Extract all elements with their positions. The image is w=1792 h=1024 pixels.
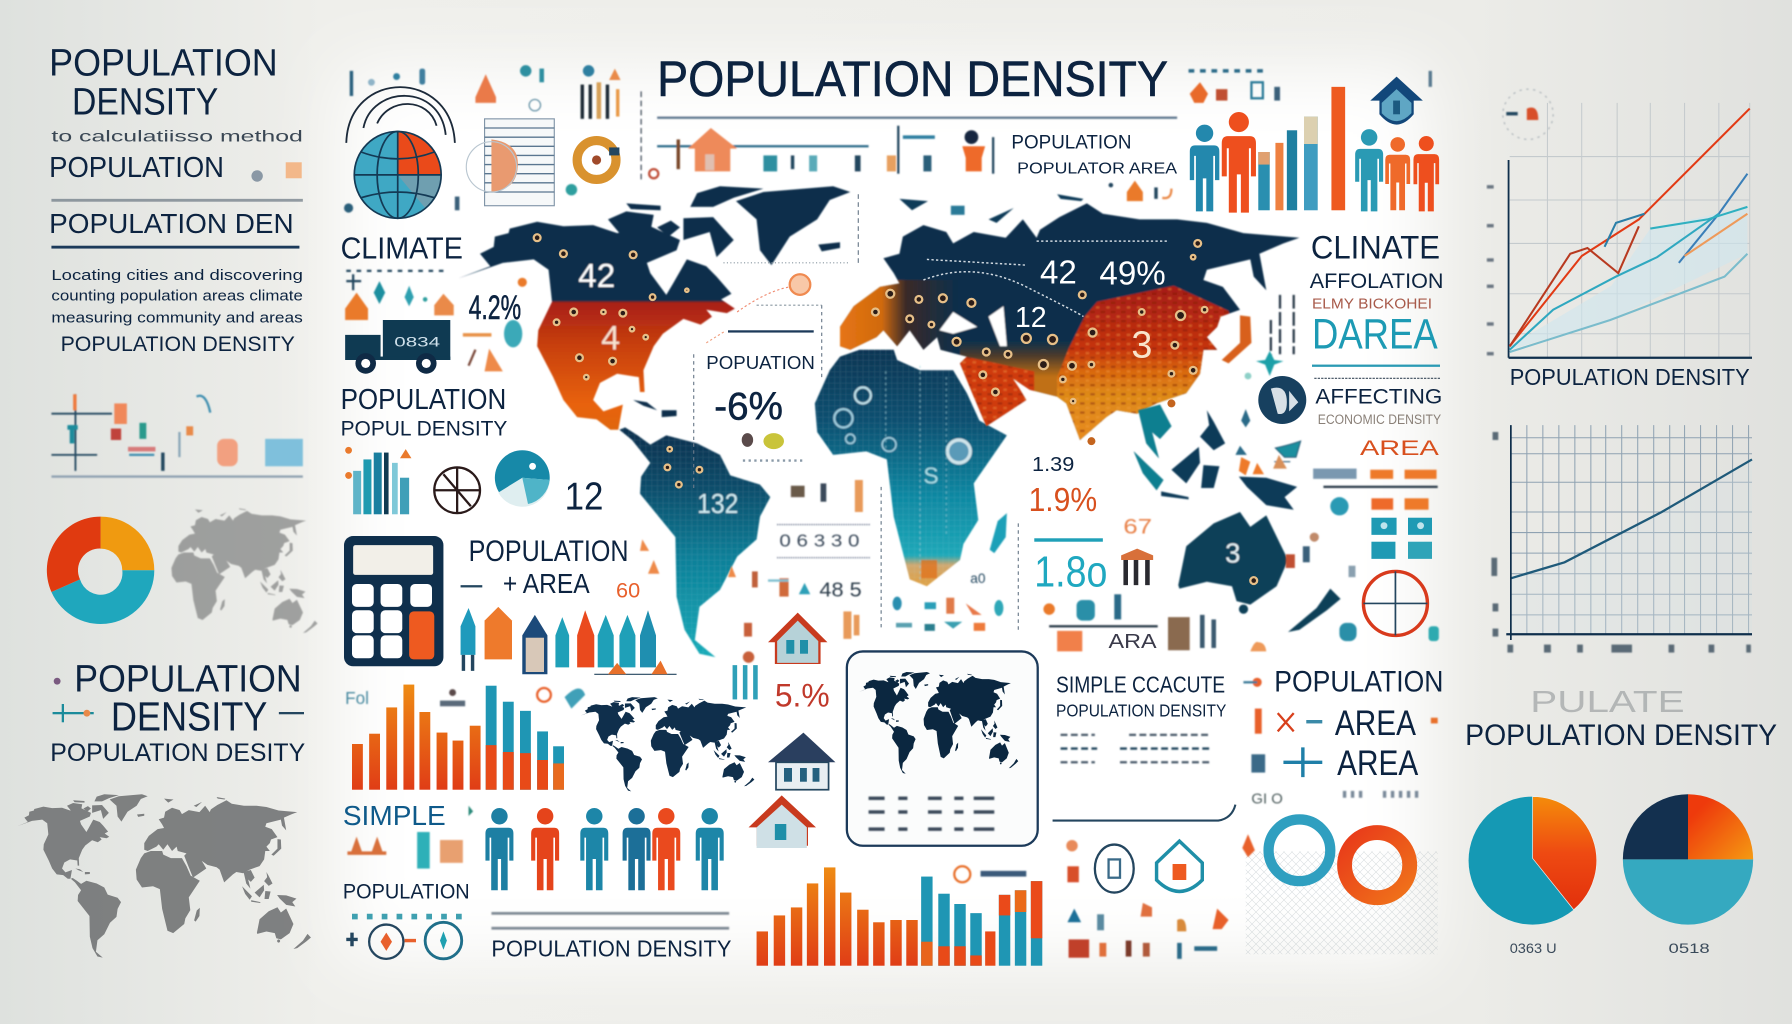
area word 1: AREA <box>1335 703 1416 743</box>
population density subtitle: POPULATION DENSITY <box>61 331 295 356</box>
person 1 <box>1190 125 1219 211</box>
chart: grid line chart <box>1491 425 1752 653</box>
stat: 42 north america: 42 <box>578 258 615 295</box>
stat: 12: 12 <box>565 476 603 519</box>
icon: house lower <box>749 795 816 848</box>
stat 1.9%: 1.9% <box>1029 482 1097 519</box>
marks right of asia <box>1235 295 1438 515</box>
main title: POPULATION DENSITY <box>657 50 1168 107</box>
mini building bars <box>1121 549 1153 585</box>
orange number: 60 <box>616 578 640 603</box>
density heading: DENSITY <box>111 693 267 739</box>
population label mid left: POPULATION <box>341 384 506 416</box>
tick labels <box>1491 432 1751 653</box>
climate label right: CLINATE <box>1311 229 1440 265</box>
small icons above rings <box>1242 791 1423 857</box>
small top-right icons <box>1189 71 1432 103</box>
left density block <box>50 657 305 767</box>
pie label left: 0363 U <box>1510 941 1557 956</box>
icon: dark circle badge <box>1258 376 1306 424</box>
teal rule <box>1312 365 1440 367</box>
icon: document with lines <box>466 119 554 206</box>
description text: Locating cities and discovering <box>51 268 303 284</box>
axis ticks <box>1487 185 1494 355</box>
pie label right: 0518 <box>1669 941 1710 956</box>
population word: POPULATION <box>1274 665 1443 698</box>
line chart caption: POPULATION DENSITY <box>1510 364 1750 390</box>
person 2 <box>1222 112 1256 213</box>
stat: 3 australia: 3 <box>1225 537 1240 568</box>
map card <box>847 651 1038 846</box>
simple calculate heading: SIMPLE CCACUTE <box>1056 672 1225 698</box>
small climate icons <box>345 271 527 320</box>
callout label: POPUATION <box>706 352 815 373</box>
icon pair of circles <box>346 917 466 959</box>
bar chart 2 <box>757 867 1042 966</box>
callout icons <box>742 433 784 449</box>
population area label: POPULATOR AREA <box>1017 161 1178 178</box>
right heading population density: POPULATION DENSITY <box>1465 719 1777 752</box>
simple label: SIMPLE <box>343 800 446 831</box>
person red <box>531 808 559 890</box>
person blue <box>623 808 651 890</box>
dotted routes <box>923 241 1167 317</box>
card data rows <box>869 797 994 831</box>
small icons around south america tail: 48 5 <box>819 579 862 602</box>
right text block <box>1310 229 1443 460</box>
stat: 132 south america: 132 <box>697 488 738 519</box>
small icons below africa: a0 <box>970 571 986 586</box>
minus markers <box>53 678 304 722</box>
icon: red target circle <box>1363 571 1427 635</box>
dash mark <box>461 585 482 587</box>
icons above bar chart <box>345 688 585 709</box>
calculator formula text <box>461 535 640 603</box>
small marks below strip <box>951 181 1171 215</box>
small truck-side marks <box>463 320 522 371</box>
small top-left icons <box>344 65 621 213</box>
climate label: CLIMATE <box>341 230 463 265</box>
density subtitle: POPULATION DESITY <box>50 739 305 767</box>
navy world map centre bottom <box>581 697 754 791</box>
population label: POPULATION <box>469 535 629 568</box>
population density caption bottom: POPULATION DENSITY <box>491 936 731 962</box>
icons above bar chart: Fol <box>345 688 369 708</box>
dashed separators <box>881 487 1018 630</box>
person teal third <box>696 808 724 890</box>
person teal <box>485 808 513 890</box>
faded heading: PULATE <box>1530 684 1685 719</box>
icon: house top right <box>1370 77 1423 125</box>
houses in circles icons <box>1095 841 1202 893</box>
panel: left text column <box>49 41 303 356</box>
calculation method caption: to calculatiisso method <box>51 129 303 146</box>
icon: house beside south america tip <box>768 613 827 664</box>
population label top middle: POPULATION <box>1011 132 1131 154</box>
people row <box>485 808 724 890</box>
area word 2: AREA <box>1337 743 1419 783</box>
description text <box>51 268 303 326</box>
small icons around south america tail: 0 6 3 3 0 <box>779 530 859 550</box>
small icons above rings: GI O <box>1251 791 1283 807</box>
left heading line 2: DENSITY <box>72 80 218 122</box>
multiply sign <box>1278 713 1294 731</box>
small icons under australia: 67 <box>1123 514 1152 539</box>
plus area label: + AREA <box>503 568 590 599</box>
world map main <box>458 186 1341 657</box>
darea label: DAREA <box>1312 311 1438 358</box>
truck label: 0834 <box>394 334 441 349</box>
stat: 4 usa: 4 <box>601 320 620 358</box>
card border <box>1053 805 1235 821</box>
callout caption row <box>743 460 806 462</box>
top strip with house and person <box>641 91 1177 183</box>
icon: gold ring <box>577 141 619 179</box>
icon: globe with arcs <box>346 87 455 218</box>
mini bars <box>1258 87 1345 210</box>
population heading: POPULATION <box>74 657 302 699</box>
small bars and percent <box>733 665 830 713</box>
stats right of africa <box>881 453 1153 630</box>
popul density label: POPUL DENSITY <box>341 415 507 440</box>
simple calculate block <box>1053 672 1235 821</box>
population label: POPULATION <box>49 152 224 184</box>
stat 1.39: 1.39 <box>1032 453 1074 476</box>
small icons below africa <box>893 571 1003 631</box>
stats on eurasia: 42 <box>1040 254 1077 291</box>
population density label: POPULATION DEN <box>49 208 294 239</box>
formula block right <box>1243 665 1443 783</box>
population label small: POPULATION <box>343 878 470 903</box>
pie chart left <box>1469 797 1597 925</box>
economy density label: ECONOMIC DENSITY <box>1318 412 1441 427</box>
callout: population percent <box>694 305 822 491</box>
gray partial world map <box>171 508 318 633</box>
person teal second <box>580 808 608 890</box>
stats on eurasia: 12 <box>1015 302 1047 334</box>
area label: AREA <box>1360 435 1440 460</box>
Eurasia <box>834 203 1299 457</box>
person 5 <box>1413 136 1439 211</box>
icon: crosshair circle <box>434 467 480 513</box>
bar chart 1 <box>352 685 564 790</box>
chart: line chart top right <box>1487 89 1752 358</box>
stats on eurasia: 49% <box>1099 256 1166 293</box>
person 3 <box>1355 129 1383 211</box>
row of buildings <box>461 607 677 674</box>
simple icons <box>347 806 473 869</box>
orange ring <box>1345 833 1410 898</box>
small marks near population label <box>251 162 302 182</box>
stat: S africa: S <box>923 462 939 488</box>
affolation label: AFFOLATION <box>1310 268 1443 293</box>
gray world map bottom left <box>17 794 311 958</box>
population dots on map <box>534 234 1257 584</box>
small area text: ARA <box>1109 630 1157 653</box>
stat 1.8: 1.8o <box>1034 548 1107 596</box>
North America <box>458 186 840 450</box>
netted ring chart area <box>1246 819 1438 954</box>
orange pin and dotted connectors <box>706 194 858 343</box>
small icons around south america tail <box>640 480 871 663</box>
callout value: -6% <box>714 385 783 428</box>
description text: counting population areas climate <box>51 289 303 305</box>
teal ring <box>1269 819 1330 881</box>
stats on eurasia: 3 <box>1131 324 1152 366</box>
teal rule stat <box>1034 538 1103 542</box>
donut chart left <box>47 517 154 624</box>
icon: house beside navy map <box>768 733 835 790</box>
Africa <box>815 194 1007 586</box>
side marks <box>1243 678 1438 773</box>
Australia and islands <box>899 194 1341 632</box>
small teal bar chart icon <box>345 447 411 514</box>
icon: calculator <box>344 536 443 666</box>
small icons under australia <box>1043 514 1439 651</box>
minus sign <box>1306 720 1322 723</box>
affecting label: AFFECTING <box>1315 383 1442 408</box>
small left mini chart <box>51 394 303 478</box>
Greenland <box>736 186 850 265</box>
left heading: POPULATION <box>49 41 278 83</box>
stat: 5 percent: 5.% <box>775 677 830 713</box>
badge above chart <box>1503 89 1553 139</box>
person 4 <box>1385 137 1410 210</box>
row lines <box>1061 735 1211 762</box>
small red label: ELMY BICKOHEI <box>1312 297 1432 313</box>
divider dashed line <box>51 199 303 202</box>
small text rows <box>491 912 729 930</box>
icon: truck <box>345 320 450 374</box>
plus sign <box>1283 747 1322 777</box>
top-right people and bars <box>1190 87 1439 213</box>
black and caspian seas <box>939 306 1007 346</box>
South America <box>619 427 770 657</box>
card map <box>859 672 1018 774</box>
population density subheading: POPULATION DENSITY <box>1056 701 1227 721</box>
orange dots near asia <box>1087 399 1175 445</box>
description text: measuring community and areas <box>51 310 303 326</box>
stats on eurasia <box>1015 254 1166 366</box>
small icons centre bottom <box>954 840 1229 959</box>
icon tiles <box>1371 518 1432 559</box>
stat: 4.2 percent: 4.2% <box>469 289 521 327</box>
small pie icon <box>495 450 550 507</box>
navy divider <box>51 246 299 249</box>
pie chart right <box>1623 794 1753 925</box>
person red second <box>652 808 680 890</box>
